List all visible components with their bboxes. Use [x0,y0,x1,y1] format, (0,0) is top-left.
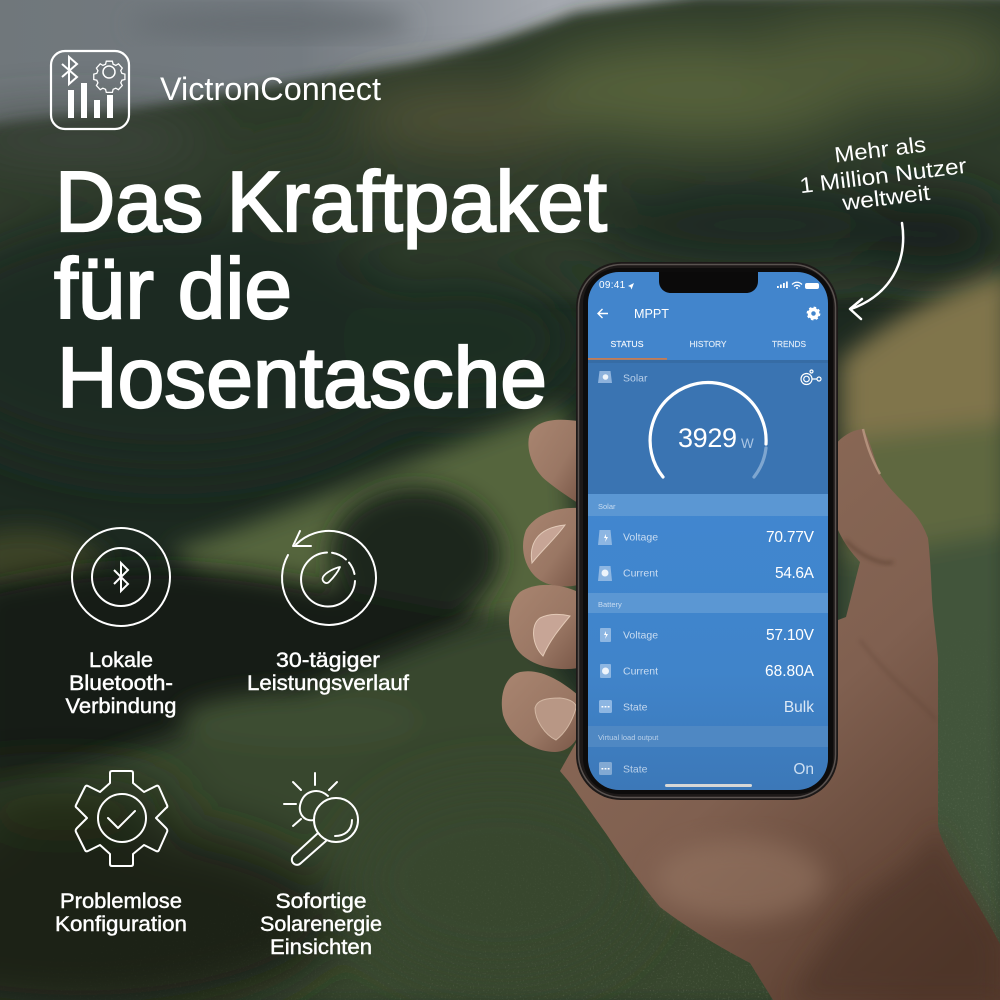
tabs: HISTORY [690,339,727,349]
label: solar insights: Einsichten [270,936,372,959]
label: configuration [55,890,187,936]
tabs [588,339,806,360]
olive middle hill [0,405,580,640]
title: für die [54,242,292,337]
label: solar insights: Sofortige [276,890,366,913]
status bar [599,281,819,290]
label: solar insights [260,890,382,959]
section: virtual load output: Virtual load output [598,733,659,742]
section: virtual load output: State [623,764,648,776]
section: battery: 68.80A [765,663,815,680]
dark tree blobs [0,487,500,800]
section: virtual load output [588,726,828,778]
callout: user count: Mehr als [833,132,927,168]
home indicator [665,784,752,787]
solar power gauge: W [741,436,754,451]
middle finger with nail [523,508,578,587]
palm and thumb [560,429,1000,1000]
phone [576,262,838,800]
app header: MPPT [634,307,669,321]
label: solar insights: Solarenergie [260,913,382,936]
label: configuration: Konfiguration [55,913,187,936]
notch [659,272,758,293]
callout: user count: 1 Million Nutzer [798,153,968,198]
section: solar: Solar [598,502,616,511]
callout: user count [798,132,968,215]
icon: sun and magnifier [284,773,358,865]
section: solar: Current [623,568,658,580]
brand name: VictronConnect [160,71,381,107]
hand shading [790,824,1000,1000]
tabs: STATUS [610,339,644,349]
logo icon [51,51,129,129]
label: configuration: Problemlose [60,890,182,913]
section: battery: Current [623,666,658,678]
icon: bluetooth [72,528,170,626]
phone body [576,262,838,800]
ring finger with nail [509,585,578,669]
hand holding the phone [502,420,1000,1000]
app header [598,307,820,321]
section: battery: State [623,702,648,714]
callout: user count: weltweit [840,180,931,215]
section: solar: 54.6A [775,565,815,582]
label: bluetooth: Verbindung [66,695,176,718]
index finger [528,420,578,503]
label: history [247,649,409,695]
upper forest ridge [0,0,1000,300]
status bar: 09:41 [599,280,626,291]
little finger with nail [502,671,578,752]
title: Das Kraftpaket [55,155,607,250]
section: battery: Battery [598,600,622,609]
phone screen [588,272,828,790]
label: history: 30-tägiger [276,649,380,672]
label: bluetooth: Bluetooth- [69,672,173,695]
label: bluetooth [66,649,176,718]
title [54,155,607,426]
section: solar: 70.77V [766,529,815,546]
icon: 30-day history dial [282,531,376,625]
section: battery: Voltage [623,630,658,642]
section: battery [588,593,828,716]
section: solar: Voltage [623,532,658,544]
solar power gauge [598,370,821,477]
tabs: TRENDS [772,339,806,349]
label: bluetooth: Lokale [89,649,153,672]
solar power gauge: Solar [623,372,648,384]
title: Hosentasche [57,331,547,426]
arrow pointing to phone [850,223,903,319]
solar power gauge: 3929 [678,423,737,453]
label: history: Leistungsverlauf [247,672,409,695]
section: solar [588,494,828,582]
section: battery: Bulk [784,699,814,716]
section: virtual load output: On [793,761,814,778]
right tan hillside [840,270,1000,1000]
icon: gear with check mark [76,771,167,866]
section: battery: 57.10V [766,627,815,644]
lower grass hill [0,615,860,1000]
